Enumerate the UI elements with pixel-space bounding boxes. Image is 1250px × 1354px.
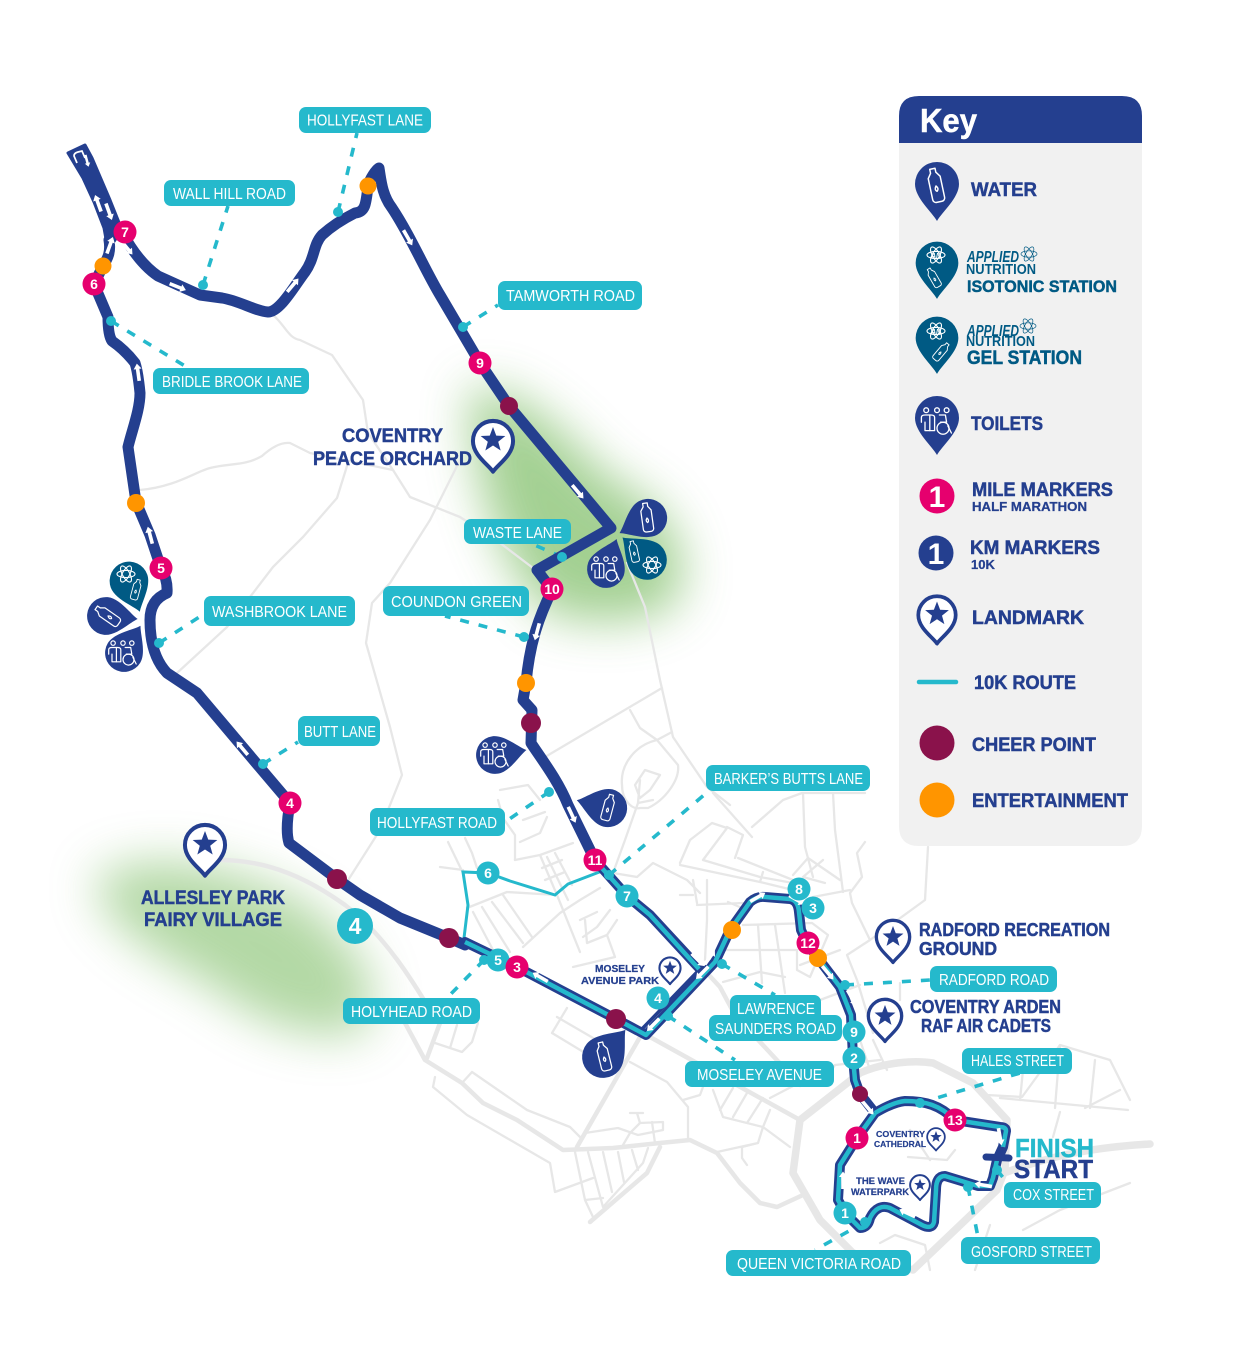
KM markers: 7 [623, 888, 631, 904]
KM markers: 2 [850, 1050, 858, 1066]
key: entertainment: ENTERTAINMENT [972, 791, 1128, 812]
label: Bridle Brook Lane [153, 368, 309, 394]
start finish line [986, 1157, 1009, 1158]
key: gel station [916, 317, 1082, 374]
toilet pin near cheer point [473, 731, 529, 777]
panel: key [899, 96, 1142, 846]
KM markers: 3 [809, 900, 817, 916]
landmark: Coventry Arden RAF Air Cadets: COVENTRY ARDEN [910, 997, 1061, 1017]
landmark: The Wave Waterpark: THE WAVE [856, 1176, 905, 1186]
label: Radford Road [930, 966, 1057, 992]
key: gel station: NUTRITION [966, 333, 1035, 350]
label: Hollyfast Road: HOLLYFAST ROAD [377, 815, 497, 832]
key: isotonic station: APPLIED [966, 249, 1019, 266]
landmark: Coventry Cathedral: COVENTRY [876, 1129, 925, 1139]
key header: Key [920, 102, 978, 139]
key: cheer point: CHEER POINT [972, 735, 1096, 756]
key: cheer point [920, 726, 1096, 760]
cheer points [327, 397, 868, 1102]
landmark: Allesley Park Fairy Village [141, 825, 285, 931]
landmark: The Wave Waterpark: WATERPARK [851, 1187, 910, 1197]
key: isotonic station: AN [930, 253, 942, 260]
label: Bridle Brook Lane: BRIDLE BROOK LANE [162, 374, 302, 391]
label anchor dots [106, 207, 1002, 1227]
KM markers: 5 [494, 952, 502, 968]
key: mile markers: 1 [929, 481, 945, 514]
landmark: Moseley Avenue Park: AVENUE PARK [581, 975, 659, 987]
label: Hollyfast Road [370, 808, 505, 836]
label: Coundon Green: COUNDON GREEN [391, 594, 522, 611]
key: KM markers [918, 536, 1100, 572]
entertainment points [94, 178, 827, 967]
key: gel station: AN [930, 329, 942, 336]
mile markers: 5 [157, 560, 165, 576]
finish and start heading [1014, 1133, 1094, 1184]
green area: Allesley Park [95, 862, 373, 1035]
label: Moseley Avenue [685, 1061, 834, 1087]
key: entertainment [920, 782, 1128, 818]
label: Barker's Butts Lane [706, 765, 870, 791]
label: Wall Hill Road [164, 180, 295, 206]
station cluster: Washbrook [85, 556, 158, 679]
label: Hales Street [962, 1048, 1072, 1074]
label: Barker's Butts Lane: BARKER’S BUTTS LANE [714, 771, 863, 788]
10K route shared section [465, 866, 1006, 1228]
key: gel station: APPLIED [966, 323, 1019, 340]
label: Queen Victoria Road [726, 1250, 911, 1276]
landmark: Moseley Avenue Park: MOSELEY [595, 963, 645, 975]
mile markers: 1 [853, 1130, 861, 1146]
label: Hollyfast Lane [299, 107, 431, 133]
label: Holyhead Road [343, 998, 480, 1024]
label: Wall Hill Road: WALL HILL ROAD [173, 186, 286, 203]
label: Washbrook Lane [204, 596, 355, 626]
label: Lawrence Saunders Road: SAUNDERS ROAD [715, 1021, 836, 1038]
KM markers: 4 [654, 990, 662, 1006]
green area: Coventry Peace Orchard [470, 388, 683, 621]
landmark: Allesley Park Fairy Village: FAIRY VILLAGE [144, 909, 282, 931]
key: mile markers: MILE MARKERS [972, 480, 1113, 501]
label: Cox Street: COX STREET [1013, 1187, 1094, 1204]
key: toilets: TOILETS [971, 414, 1043, 435]
label: Waste Lane: WASTE LANE [473, 525, 562, 542]
KM markers: 4 [349, 913, 362, 939]
landmark: Radford Recreation Ground: GROUND [919, 939, 997, 959]
finish and start heading: START [1014, 1154, 1093, 1184]
key: mile markers [920, 478, 1113, 514]
key: isotonic station: NUTRITION [966, 261, 1036, 278]
label: Queen Victoria Road: QUEEN VICTORIA ROAD [737, 1256, 901, 1273]
key: 10K route: 10K ROUTE [974, 673, 1076, 694]
mile markers: 9 [476, 355, 484, 371]
key: KM markers: 1 [928, 538, 944, 571]
key: landmark: LANDMARK [972, 608, 1084, 629]
label: Radford Road: RADFORD ROAD [939, 972, 1049, 989]
mile markers: 11 [588, 852, 603, 868]
landmark: Allesley Park Fairy Village: ALLESLEY PARK [141, 887, 285, 909]
label: Lawrence Saunders Road [709, 995, 842, 1041]
landmark: Moseley Avenue Park [581, 957, 681, 987]
key: toilets [915, 396, 1043, 455]
label: Waste Lane [464, 519, 571, 544]
KM markers: 8 [795, 881, 803, 897]
label: Cox Street [1004, 1182, 1101, 1208]
mile markers: 7 [121, 224, 129, 240]
station cluster: peace orchard [582, 492, 675, 593]
label: Butt Lane [298, 716, 380, 746]
water pin Holyhead Road [574, 1017, 642, 1086]
leader lines for street labels [111, 133, 1020, 1250]
label: Gosford Street [961, 1237, 1100, 1264]
landmark: Radford Recreation Ground [876, 920, 1110, 962]
key: KM markers: 10K [971, 557, 996, 572]
landmark: Coventry Arden RAF Air Cadets: RAF AIR CADETS [921, 1016, 1051, 1036]
mile markers: 6 [90, 276, 98, 292]
landmark: The Wave Waterpark [851, 1175, 930, 1200]
label: Tamworth Road: TAMWORTH ROAD [506, 288, 635, 305]
landmark: Coventry Cathedral: CATHEDRAL [874, 1139, 926, 1149]
mile markers: 10 [544, 581, 560, 597]
key: isotonic station [916, 242, 1117, 299]
mile markers [82, 220, 966, 1150]
mile markers: 4 [286, 795, 294, 811]
half marathon route [68, 145, 1006, 1228]
KM markers [337, 862, 866, 1224]
KM markers: 9 [850, 1024, 858, 1040]
label: Butt Lane: BUTT LANE [304, 724, 376, 741]
mile markers: 13 [947, 1112, 963, 1128]
label: Gosford Street: GOSFORD STREET [971, 1244, 1092, 1261]
landmark: Coventry Arden RAF Air Cadets [868, 997, 1061, 1041]
KM markers: 1 [841, 1205, 849, 1221]
route direction arrows [74, 151, 1005, 1220]
finish and start heading: FINISH [1015, 1133, 1094, 1163]
key: landmark [918, 596, 1084, 644]
landmark: Coventry Peace Orchard: PEACE ORCHARD [313, 448, 472, 470]
mile markers: 3 [513, 959, 521, 975]
label: Coundon Green [383, 586, 529, 616]
label: Tamworth Road [498, 281, 642, 310]
key: mile markers: HALF MARATHON [972, 499, 1087, 514]
key: water: WATER [971, 180, 1037, 201]
key: KM markers: KM MARKERS [970, 538, 1100, 559]
label: Hollyfast Lane: HOLLYFAST LANE [307, 112, 423, 130]
label: Hales Street: HALES STREET [971, 1053, 1064, 1070]
label: Holyhead Road: HOLYHEAD ROAD [351, 1004, 472, 1021]
landmark: Coventry Cathedral [874, 1128, 945, 1151]
10K only route line [463, 871, 602, 938]
landmark: Coventry Peace Orchard: COVENTRY [342, 425, 443, 447]
background street network [140, 315, 1150, 1270]
label: Washbrook Lane: WASHBROOK LANE [212, 604, 347, 621]
street labels [153, 107, 1101, 1276]
mile markers: 12 [800, 935, 816, 951]
water pin Hollyfast Road [572, 782, 631, 831]
key: water [915, 162, 1037, 221]
key: gel station: GEL STATION [967, 348, 1082, 369]
key header [899, 96, 1142, 143]
landmark: Radford Recreation Ground: RADFORD RECREATION [919, 920, 1110, 940]
label: Moseley Avenue: MOSELEY AVENUE [697, 1067, 822, 1084]
KM markers: 6 [484, 865, 492, 881]
key: isotonic station: ISOTONIC STATION [967, 277, 1117, 296]
landmark: Coventry Peace Orchard [313, 421, 513, 472]
label: Lawrence Saunders Road: LAWRENCE [737, 1001, 815, 1018]
